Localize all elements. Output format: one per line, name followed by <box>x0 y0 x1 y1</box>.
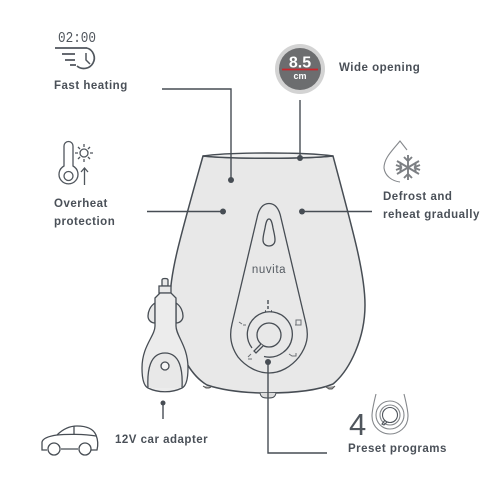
icon: fast heating clock: 02:00 <box>58 30 96 47</box>
icon: 8.5 cm opening <box>275 44 325 94</box>
icon: 8.5 cm opening: 8.5 <box>289 54 311 72</box>
icon: 4 presets: 4 <box>349 407 366 442</box>
icon: 4 presets <box>349 394 408 442</box>
icon: 8.5 cm opening: cm <box>293 71 307 81</box>
dial <box>239 300 301 359</box>
label: overheat protection <box>54 198 115 228</box>
label: defrost and reheat: Defrost and <box>383 191 452 203</box>
label: overheat protection: protection <box>54 216 115 228</box>
label: wide opening: Wide opening <box>339 62 420 74</box>
leader lines <box>147 89 372 453</box>
label: preset programs: Preset programs <box>348 443 447 455</box>
warmer body <box>170 153 365 398</box>
icon: defrost drop <box>384 141 420 182</box>
label: 12V car adapter: 12V car adapter <box>115 434 208 446</box>
label: overheat protection: Overheat <box>54 198 108 210</box>
icon: fast heating clock <box>55 30 96 69</box>
brand: nuvita: nuvita <box>252 264 286 276</box>
label: defrost and reheat <box>383 191 480 221</box>
teardrop control panel <box>231 204 307 373</box>
car adapter <box>142 278 188 392</box>
icon: car <box>42 426 98 455</box>
icon: overheat thermometer <box>59 142 93 185</box>
label: defrost and reheat: reheat gradually <box>383 209 480 221</box>
label: fast heating: Fast heating <box>54 80 128 92</box>
